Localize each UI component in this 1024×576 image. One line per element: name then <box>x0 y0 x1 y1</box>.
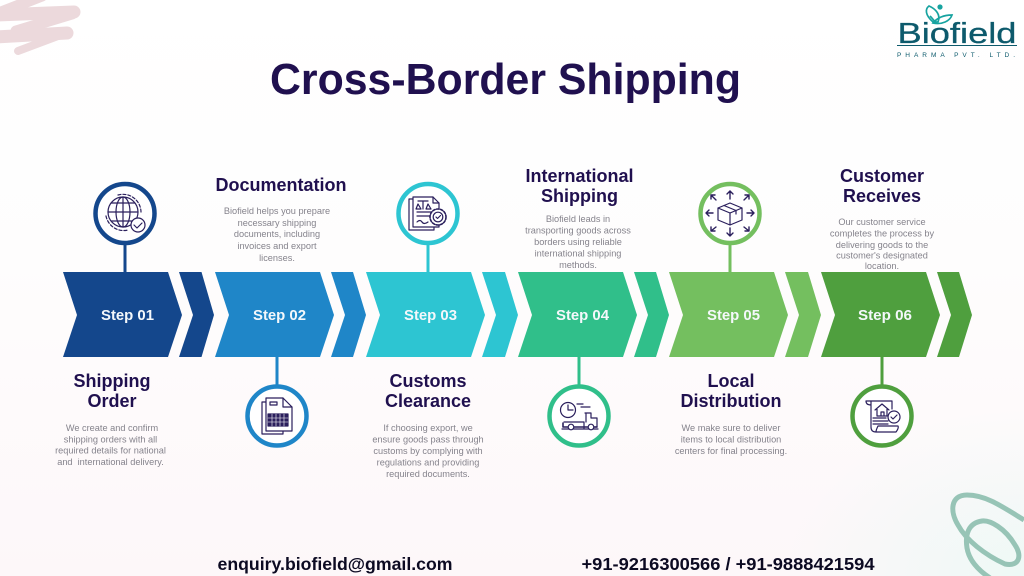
heading: shipping order: Order <box>87 391 137 411</box>
logo tagline: PHARMA PVT. LTD. <box>897 52 1015 59</box>
text: customs clearance description: regulations and providing <box>377 458 479 468</box>
heading: customs clearance: Clearance <box>385 391 471 411</box>
text: customer receives description: delivering goods to the <box>836 240 928 250</box>
contact: phone numbers: +91-9216300566 / +91-9888421594 <box>582 554 875 574</box>
icon: delivery scroll with house <box>852 357 912 446</box>
text: customs clearance description: required documents. <box>386 469 470 479</box>
text: customer receives description: customer's designated <box>836 250 928 260</box>
text: international shipping description: borders using reliable <box>534 237 622 247</box>
text: local distribution description: items to local distribution <box>681 434 781 444</box>
heading: international shipping: Shipping <box>541 186 618 206</box>
icon: box with arrows <box>700 184 760 273</box>
step 01 label: Step 01 <box>101 307 154 324</box>
step 02 arrow <box>215 272 366 357</box>
decoration: pink scribble <box>0 0 74 51</box>
title: Cross-Border Shipping <box>270 55 741 104</box>
logo <box>897 4 1017 59</box>
heading: local distribution: Distribution <box>680 391 782 411</box>
text: international shipping description: international shipping <box>535 248 621 258</box>
text: documentation description: Biofield helps you prepare <box>224 206 330 216</box>
step 05 arrow <box>669 272 821 357</box>
step 02 label: Step 02 <box>253 307 306 324</box>
icon: globe with check <box>96 184 154 273</box>
heading: shipping order: Shipping <box>74 371 150 391</box>
text: shipping order description: and international delivery. <box>57 457 164 467</box>
step 04 label: Step 04 <box>556 307 610 324</box>
heading: international shipping: International <box>525 166 634 186</box>
logo mark <box>926 4 952 24</box>
logo underline <box>897 45 1017 46</box>
step 03 label: Step 03 <box>404 307 457 324</box>
contact: email: enquiry.biofield@gmail.com <box>218 554 452 574</box>
logo wordmark: Biofield <box>898 18 1016 50</box>
text: customs clearance description: If choosing export, we <box>383 423 473 433</box>
text: shipping order description: We create and confirm <box>66 423 158 433</box>
heading: customer receives: Customer <box>840 166 924 186</box>
text: customer receives description: location. <box>865 261 899 271</box>
icon: truck with clock <box>550 357 608 446</box>
text: customs clearance description: ensure goods pass through <box>372 434 484 444</box>
heading: customs clearance: Customs <box>389 371 467 391</box>
text: shipping order description: shipping orders with all <box>64 434 157 444</box>
decoration: green loops <box>953 495 1024 576</box>
text: documentation description: necessary shipping <box>238 218 316 228</box>
text: documentation description: invoices and export <box>237 241 317 251</box>
text: international shipping description: methods. <box>559 260 597 270</box>
text: customs clearance description: customs by complying with <box>373 446 483 456</box>
heading: documentation: Documentation <box>215 175 347 195</box>
text: documentation description: documents, including <box>234 229 320 239</box>
icon: customs document with gear <box>398 184 458 273</box>
text: customer receives description: completes the process by <box>830 228 934 238</box>
step 03 arrow <box>366 272 518 357</box>
text: customer receives description: Our customer service <box>838 217 926 227</box>
heading: customer receives: Receives <box>843 186 921 206</box>
heading: local distribution: Local <box>707 371 755 391</box>
icon: invoice document <box>248 357 306 446</box>
step 06 label: Step 06 <box>858 307 912 324</box>
step 05 label: Step 05 <box>707 307 760 324</box>
text: international shipping description: Biofield leads in <box>546 214 610 224</box>
text: local distribution description: centers for final processing. <box>675 446 787 456</box>
step 06 arrow <box>821 272 972 357</box>
text: local distribution description: We make sure to deliver <box>682 423 780 433</box>
text: documentation description: licenses. <box>259 253 295 263</box>
text: international shipping description: transporting goods across <box>525 226 631 236</box>
step 04 arrow <box>518 272 669 357</box>
step 01 arrow <box>63 272 214 357</box>
text: shipping order description: required details for national <box>55 446 166 456</box>
